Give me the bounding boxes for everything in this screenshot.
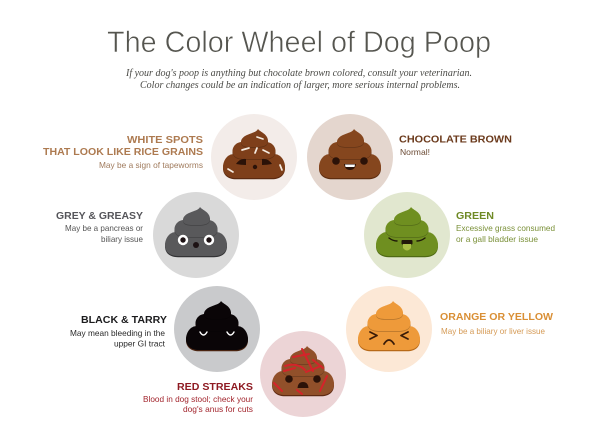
label: green: or a gall bladder issue [456,234,538,244]
label: grey and greasy: May be a pancreas or [65,223,143,233]
label: white spots: THAT LOOK LIKE RICE GRAINS [43,146,203,158]
subtitle [125,68,472,91]
label: white spots: May be a sign of tapeworms [99,160,203,170]
label: green: GREEN [456,210,494,222]
label: black and tarry: BLACK & TARRY [81,314,167,326]
label: red streaks: RED STREAKS [177,381,253,393]
label: white spots: WHITE SPOTS [127,134,203,146]
title: The Color Wheel of Dog Poop [107,26,491,59]
label: white spots [43,134,203,170]
panel: white spots poop [211,114,297,200]
panel: orange or yellow poop [346,286,432,372]
label: red streaks: dog's anus for cuts [183,404,253,414]
subtitle: Color changes could be an indication of larger, more serious internal problems. [140,80,460,91]
label: grey and greasy: biliary issue [101,234,143,244]
label: grey and greasy [56,210,143,244]
panel: red streaks poop [260,331,346,417]
label: black and tarry: May mean bleeding in the [70,328,165,338]
label: green: Excessive grass consumed [456,223,555,233]
label: chocolate brown [399,134,512,157]
label: chocolate brown: Normal! [400,147,430,157]
label: red streaks: Blood in dog stool; check your [143,394,253,404]
panel: black and tarry poop [174,286,260,372]
label: orange or yellow [440,311,553,336]
label: black and tarry: upper GI tract [114,338,166,348]
label: black and tarry [70,314,167,348]
label: green [456,210,555,244]
subtitle: If your dog's poop is anything but chocolate brown colored, consult your veterinarian. [125,68,472,79]
label: orange or yellow: May be a biliary or liver issue [441,326,545,336]
panel: green poop [364,192,450,278]
label: chocolate brown: CHOCOLATE BROWN [399,134,512,146]
label: grey and greasy: GREY & GREASY [56,210,143,222]
label: orange or yellow: ORANGE OR YELLOW [440,311,553,323]
panel: grey and greasy poop [153,192,239,278]
panel: chocolate brown poop [307,114,393,200]
label: red streaks [143,381,253,414]
